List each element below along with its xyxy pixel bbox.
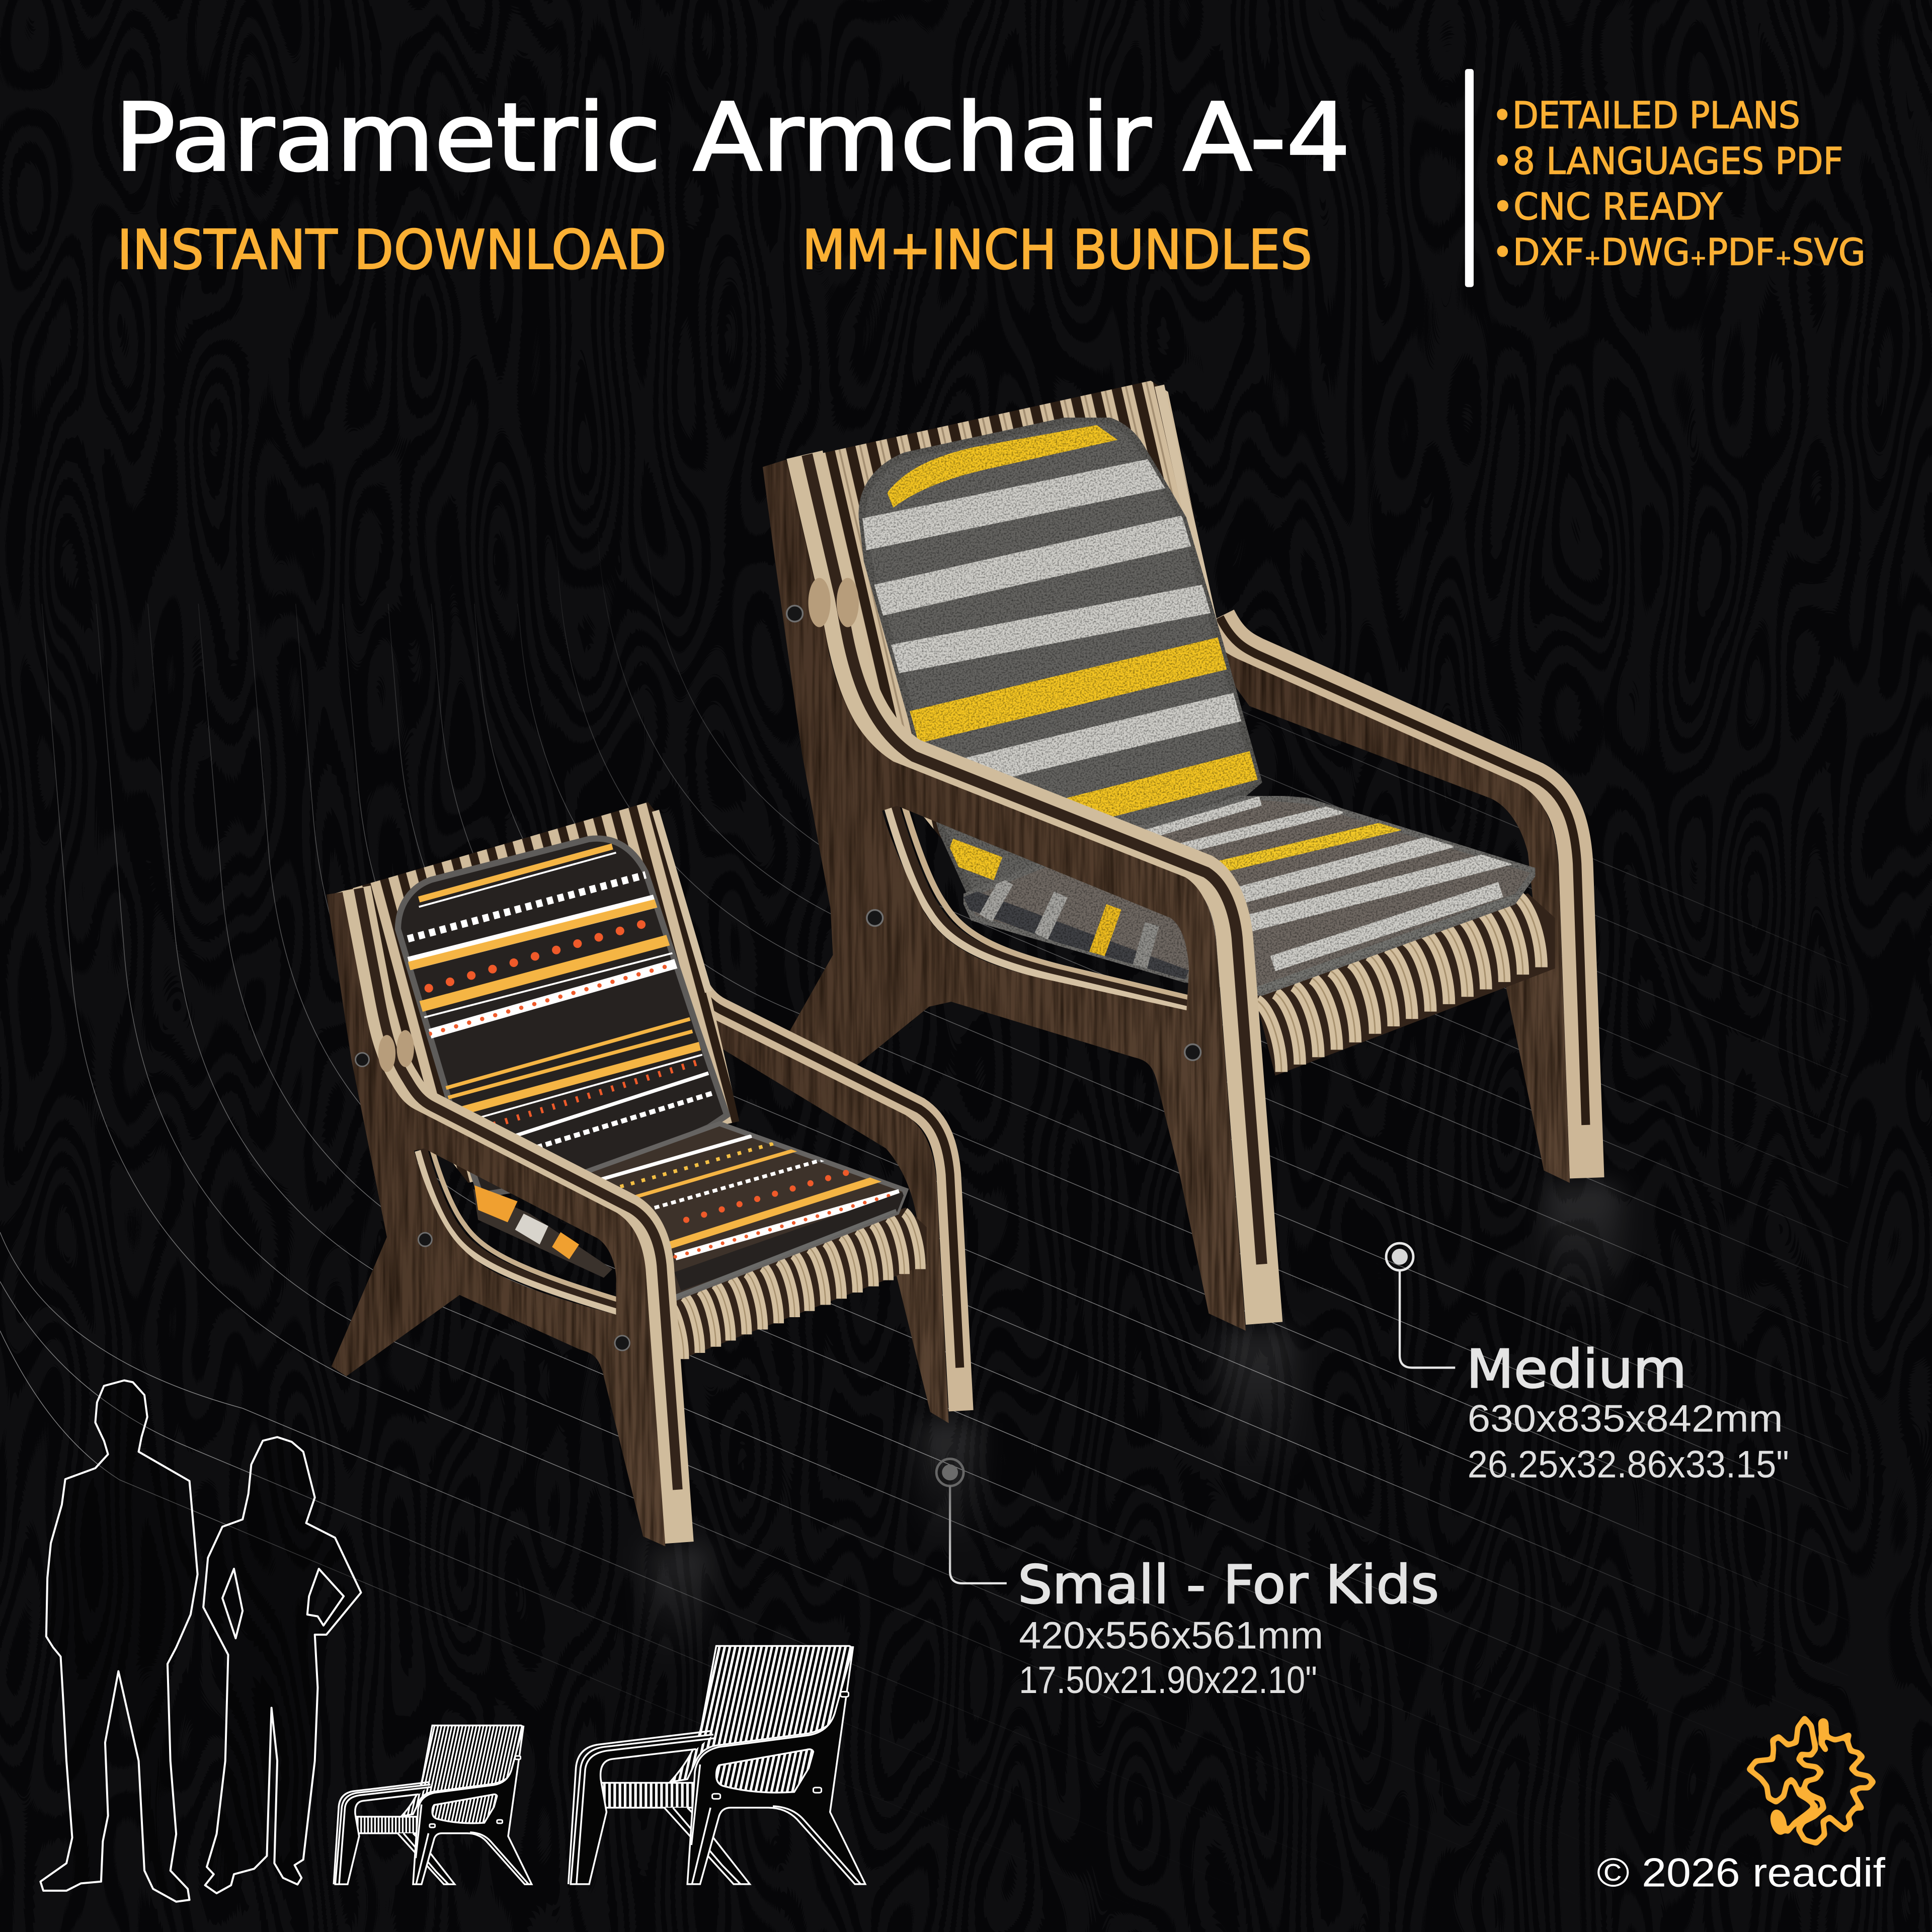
cushion underside in window: [473, 1185, 612, 1278]
dowel caps: [378, 1030, 414, 1072]
logo tail: [1821, 1737, 1825, 1749]
callout: small: [936, 1459, 1439, 1702]
subtitle: bundles: MM+INCH BUNDLES: [802, 219, 1312, 282]
near panel ply edge: [804, 455, 1264, 1323]
marker: [936, 1459, 963, 1486]
window ply strips: [887, 797, 1204, 1010]
seat cushion: [963, 796, 1535, 996]
floor reflections: [647, 1183, 1620, 1657]
chair: small: [327, 802, 961, 1546]
seat slats: [1254, 894, 1555, 1076]
back cushion: [850, 418, 1269, 900]
chair: medium: [763, 381, 1587, 1331]
imperial dimensions: 26.25x32.86x33.15": [1468, 1443, 1789, 1486]
back slat right edge: [1159, 386, 1214, 628]
back cushion: [398, 839, 727, 1195]
title: Parametric Armchair A-4: [115, 83, 1350, 192]
dowel caps: [809, 578, 859, 627]
logo blob lower left: [1767, 1808, 1790, 1837]
leader line: [950, 1486, 1007, 1583]
feature list: [1492, 95, 1866, 274]
silhouette: woman: [203, 1437, 361, 1893]
bolts: [787, 606, 1201, 1060]
size name: Medium: [1466, 1338, 1687, 1400]
window ply strips: [418, 1142, 631, 1312]
size name: Small - For Kids: [1018, 1554, 1439, 1616]
near panel ply edge: [356, 889, 679, 1543]
feature: formats: •DXF+DWG+PDF+SVG: [1492, 231, 1866, 274]
back slat right edge: [656, 811, 708, 992]
metric dimensions: 420x556x561mm: [1019, 1615, 1323, 1657]
marker: [1386, 1243, 1413, 1270]
far side panel: [1201, 617, 1587, 1183]
divider: [1465, 69, 1474, 287]
seat cushion: [562, 1123, 906, 1300]
feature: plans: •DETAILED PLANS: [1492, 95, 1800, 137]
back slats: [776, 381, 1251, 862]
seat slats: [665, 1208, 927, 1359]
floor contour lines: [0, 493, 1848, 1932]
callout: medium: [1386, 1243, 1789, 1486]
logo outline: [1749, 1718, 1873, 1843]
floor line fades: [0, 739, 1932, 1932]
feature: cnc: •CNC READY: [1492, 186, 1723, 228]
near side panel: [763, 459, 1246, 1331]
leader line: [1400, 1270, 1455, 1367]
far side panel: [681, 980, 961, 1423]
line drawing: small chair: [334, 1726, 532, 1884]
silhouette: man: [40, 1381, 198, 1902]
back slats: [335, 802, 739, 1183]
copyright: © 2026 reacdif: [1597, 1850, 1886, 1895]
feature: languages: •8 LANGUAGES PDF: [1492, 140, 1843, 183]
subtitle: instant download: INSTANT DOWNLOAD: [117, 219, 667, 282]
imperial dimensions: 17.50x21.90x22.10": [1019, 1659, 1317, 1702]
near side panel: [327, 892, 665, 1546]
scale silhouettes: [40, 1381, 865, 1902]
metric dimensions: 630x835x842mm: [1468, 1398, 1783, 1440]
bolts: [356, 1053, 629, 1350]
logo: [1749, 1718, 1873, 1843]
line drawing: medium chair: [569, 1646, 865, 1884]
logo blob top: [1823, 1723, 1824, 1732]
